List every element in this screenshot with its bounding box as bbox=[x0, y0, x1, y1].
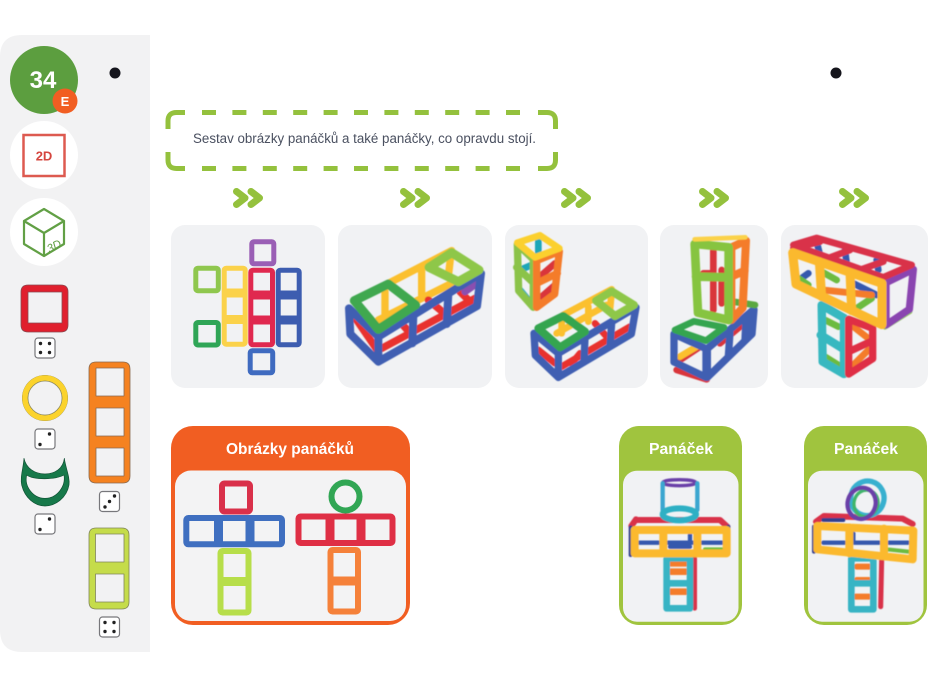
piece: orange triple strip bbox=[89, 362, 130, 483]
arrow: step 3 bbox=[564, 192, 588, 204]
panel: figure photo 2 bbox=[804, 426, 927, 625]
binder hole right bbox=[830, 68, 842, 78]
arrow: step 4 bbox=[702, 192, 726, 204]
figure: square head bbox=[186, 484, 282, 612]
figure: round head bbox=[298, 482, 392, 612]
panel: figure drawings bbox=[171, 426, 410, 625]
panel: step 3 two parts bbox=[505, 225, 648, 388]
dice: two bbox=[35, 429, 55, 449]
icon: 2D square bbox=[10, 121, 78, 189]
heading: figure drawings: Obrázky panáčků bbox=[226, 441, 354, 458]
dice: four bbox=[35, 338, 55, 358]
icon: 2D square: 2D bbox=[36, 148, 52, 164]
panel: sidebar bbox=[0, 35, 150, 652]
badge: activity number 34: E bbox=[61, 94, 70, 109]
arrow: step 1 bbox=[236, 192, 260, 204]
heading: figure 2: Panáček bbox=[834, 441, 898, 458]
instruction text: Sestav obrázky panáčků a také panáčky, co opravdu stojí. bbox=[193, 131, 536, 146]
icon: 3D cube bbox=[10, 198, 78, 266]
panel: figure photo 1 bbox=[619, 426, 742, 625]
piece: yellow ring bbox=[22, 375, 68, 421]
badge: activity number 34: 34 bbox=[30, 67, 57, 94]
piece: lime double strip bbox=[89, 528, 129, 609]
model: figure 1 bbox=[631, 480, 728, 608]
dice: two bbox=[35, 514, 55, 534]
arrow: step 5 bbox=[842, 192, 866, 204]
binder hole left bbox=[110, 68, 120, 78]
heading: figure 1: Panáček bbox=[649, 441, 713, 458]
piece: green crescent bbox=[21, 458, 69, 506]
dice: four bbox=[100, 617, 120, 637]
panel: step 1 flat net bbox=[171, 225, 325, 388]
panel: step 5 T-shape bbox=[781, 225, 928, 388]
piece: red square bbox=[21, 285, 68, 332]
icon: 3D cube: 3D bbox=[45, 238, 64, 256]
model: figure 2 bbox=[814, 477, 913, 609]
panel: step 2 open box bbox=[338, 225, 492, 388]
arrow: step 2 bbox=[404, 192, 426, 204]
badge: activity number 34 bbox=[10, 46, 78, 114]
panel: step 4 stacked bbox=[660, 225, 768, 388]
dice: three bbox=[100, 492, 120, 512]
instruction box bbox=[168, 112, 556, 168]
